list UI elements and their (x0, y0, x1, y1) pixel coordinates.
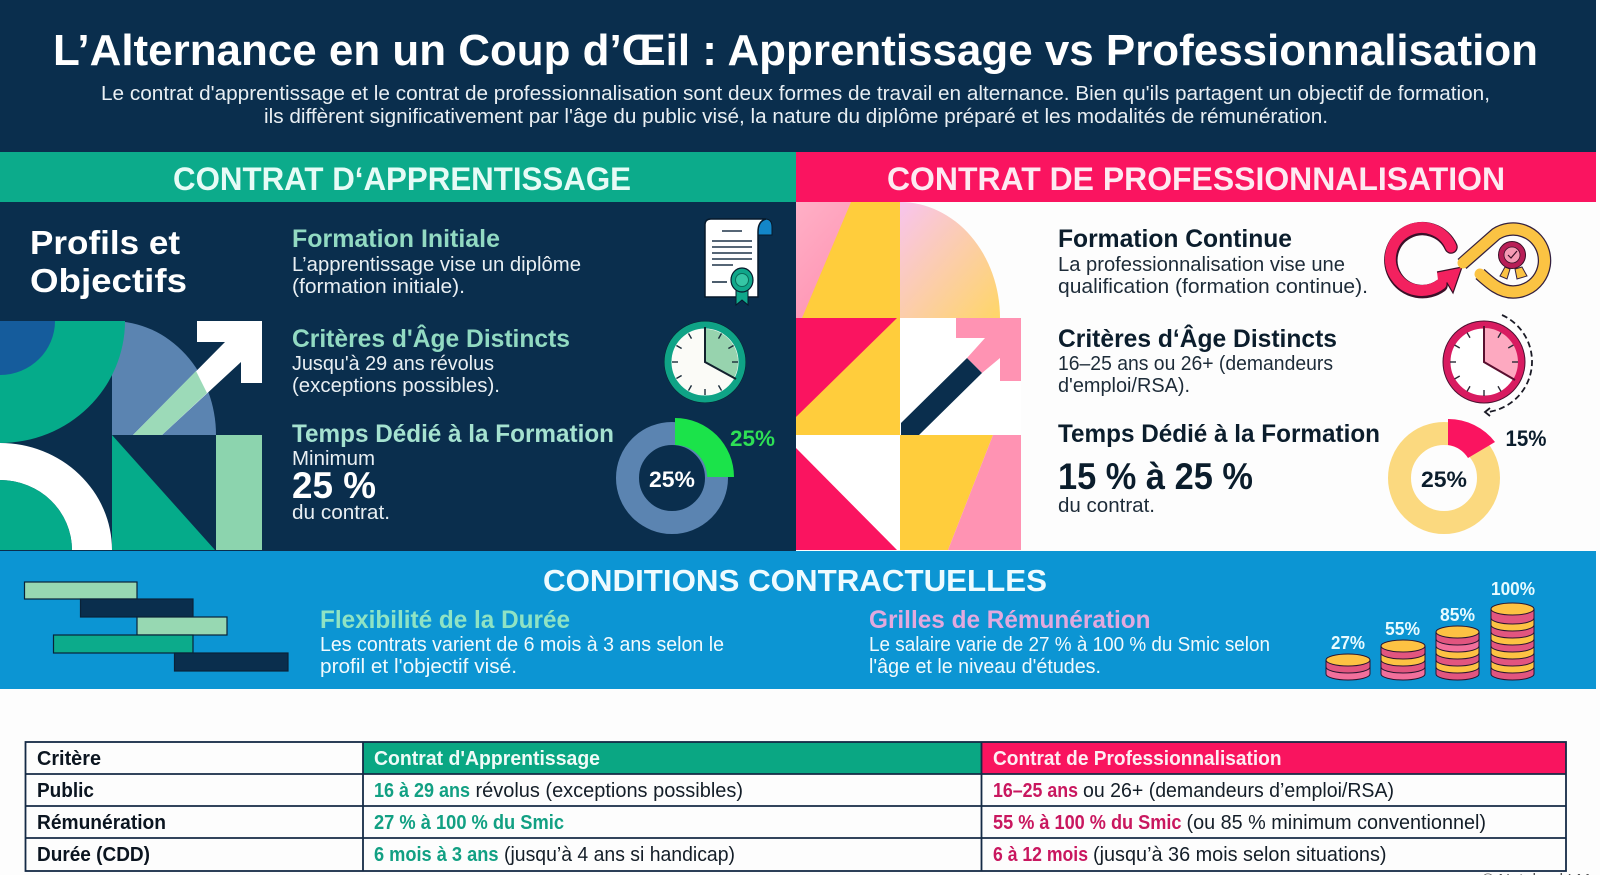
header band (0, 0, 1596, 152)
table column: professionnalisation: Contrat de Professionnalisation (993, 748, 1282, 770)
text: temps dedie a la formation (1058, 420, 1380, 517)
table column: apprentissage (374, 748, 743, 866)
table column: professionnalisation: 6 à 12 mois (993, 844, 1088, 866)
text: temps dedie a la formation: du contrat. (292, 502, 390, 524)
icon: diploma (705, 219, 772, 305)
chart: donut 25% (628, 418, 775, 522)
coin stack 55% (1381, 619, 1425, 680)
icon: gantt bars (24, 582, 288, 671)
coin stack 55%: 55% (1385, 619, 1420, 639)
chart: donut 25%: 25% (649, 467, 695, 492)
coin stack 27%: 27% (1331, 633, 1365, 653)
text: temps dedie a la formation: 25 % (292, 465, 376, 506)
geometric decoration with arrow (0, 321, 262, 550)
comparison table (25, 742, 1566, 871)
text: temps dedie a la formation (292, 420, 614, 524)
coin stack 27% (1326, 633, 1370, 680)
table column: professionnalisation: ou 26+ (demandeurs d’emploi/RSA) (1083, 780, 1394, 802)
heading: conditions contractuelles: CONDITIONS CONTRACTUELLES (543, 563, 1047, 598)
icon: clock with dashed arrow (1442, 315, 1532, 416)
icon: clock (664, 321, 746, 403)
text: formation initiale: (formation initiale). (292, 276, 465, 298)
text: criteres d'age: Jusqu'à 29 ans révolus (292, 353, 494, 375)
heading: profils et objectifs: Profils et (30, 224, 180, 261)
text: formation continue: Formation Continue (1058, 225, 1292, 253)
table column: apprentissage: 16 à 29 ans (374, 780, 470, 802)
table column: professionnalisation: 55 % à 100 % du Smic (993, 812, 1182, 834)
text: formation continue: La professionnalisation vise une (1058, 254, 1345, 276)
text: grilles de remuneration: Grilles de Rémunération (869, 606, 1150, 634)
geometric decoration with arrow (796, 202, 1021, 550)
banner: contrat de professionnalisation (796, 152, 1596, 202)
heading: profils et objectifs: Objectifs (30, 262, 187, 299)
title: L’Alternance en un Coup d’Œil : Apprentissage vs Professionnalisation (53, 26, 1538, 75)
chart: donut 15-25%: 15% (1506, 426, 1546, 451)
table row labels (37, 748, 166, 866)
text: flexibilite de la duree: profil et l'objectif visé. (320, 656, 517, 678)
icon: infinity loop with badge (1390, 227, 1545, 293)
table row labels: Public (37, 780, 94, 802)
text: grilles de remuneration: l'âge et le niveau d'études. (869, 656, 1101, 678)
table column: professionnalisation: (jusqu’à 36 mois selon situations) (1093, 844, 1386, 866)
text: flexibilite de la duree: Les contrats varient de 6 mois à 3 ans selon le (320, 634, 724, 656)
table row labels: Durée (CDD) (37, 844, 150, 866)
text: temps dedie a la formation: du contrat. (1058, 495, 1155, 517)
subtitle: Le contrat d'apprentissage et le contrat de professionnalisation sont deux formes de travail en alternance. Bien qu'ils partagent un objectif de formation, (101, 83, 1490, 105)
text: criteres d'age (1058, 323, 1337, 397)
banner: contrat de professionnalisation: CONTRAT DE PROFESSIONNALISATION (887, 161, 1505, 197)
heading: profils et objectifs (30, 224, 187, 299)
text: criteres d'age (292, 323, 570, 397)
table column: apprentissage: (jusqu’à 4 ans si handicap) (504, 844, 735, 866)
coin stack 100% (1491, 579, 1535, 680)
banner: contrat d'apprentissage: CONTRAT D‘APPRENTISSAGE (173, 161, 631, 197)
subtitle: ils diffèrent significativement par l'âge du public visé, la nature du diplôme préparé et les modalités de rémunération. (264, 106, 1328, 128)
text: formation initiale: Formation Initiale (292, 225, 500, 253)
text: flexibilite de la duree: Flexibilité de la Durée (320, 606, 570, 634)
text: formation continue: qualification (formation continue). (1058, 276, 1368, 298)
chart: donut 25%: 25% (730, 426, 775, 451)
chart: donut 15-25% (1400, 419, 1546, 522)
table column: professionnalisation (993, 748, 1486, 866)
table row labels: Rémunération (37, 812, 166, 834)
table column: apprentissage: 6 mois à 3 ans (374, 844, 498, 866)
text: flexibilite de la duree (320, 606, 724, 678)
chart: donut 15-25%: 25% (1421, 467, 1467, 492)
banner: contrat d'apprentissage (0, 152, 796, 202)
coin stack 100%: 100% (1491, 579, 1535, 599)
text: criteres d'age: Critères d'Âge Distincts (292, 323, 570, 353)
text: formation continue (1058, 225, 1368, 298)
coin stack 85%: 85% (1440, 605, 1475, 625)
coin stack 85% (1436, 605, 1479, 680)
text: formation initiale: L’apprentissage vise un diplôme (292, 254, 581, 276)
table column: apprentissage: Contrat d'Apprentissage (374, 748, 600, 770)
subtitle (101, 83, 1490, 128)
chart: coin stacks (1326, 579, 1535, 680)
text: criteres d'age: d'emploi/RSA). (1058, 375, 1190, 397)
text: criteres d'age: (exceptions possibles). (292, 375, 500, 397)
text: temps dedie a la formation: 15 % à 25 % (1058, 456, 1253, 497)
panel: conditions contractuelles (0, 551, 1596, 689)
text: grilles de remuneration (869, 606, 1270, 678)
text: temps dedie a la formation: Temps Dédié à la Formation (292, 420, 614, 448)
text: temps dedie a la formation: Minimum (292, 448, 375, 470)
table column: professionnalisation: 16–25 ans (993, 780, 1078, 802)
text: temps dedie a la formation: Temps Dédié à la Formation (1058, 420, 1380, 448)
panel: apprentissage (0, 202, 796, 551)
table column: apprentissage: 27 % à 100 % du Smic (374, 812, 564, 834)
text: criteres d'age: 16–25 ans ou 26+ (demandeurs (1058, 353, 1333, 375)
text: formation initiale (292, 225, 581, 298)
text: criteres d'age: Critères d‘Âge Distincts (1058, 323, 1337, 353)
table row labels: Critère (37, 748, 101, 770)
panel: professionnalisation (796, 202, 1596, 551)
text: grilles de remuneration: Le salaire varie de 27 % à 100 % du Smic selon (869, 634, 1270, 656)
table column: apprentissage: révolus (exceptions possibles) (476, 780, 743, 802)
table column: professionnalisation: (ou 85 % minimum conventionnel) (1186, 812, 1486, 834)
